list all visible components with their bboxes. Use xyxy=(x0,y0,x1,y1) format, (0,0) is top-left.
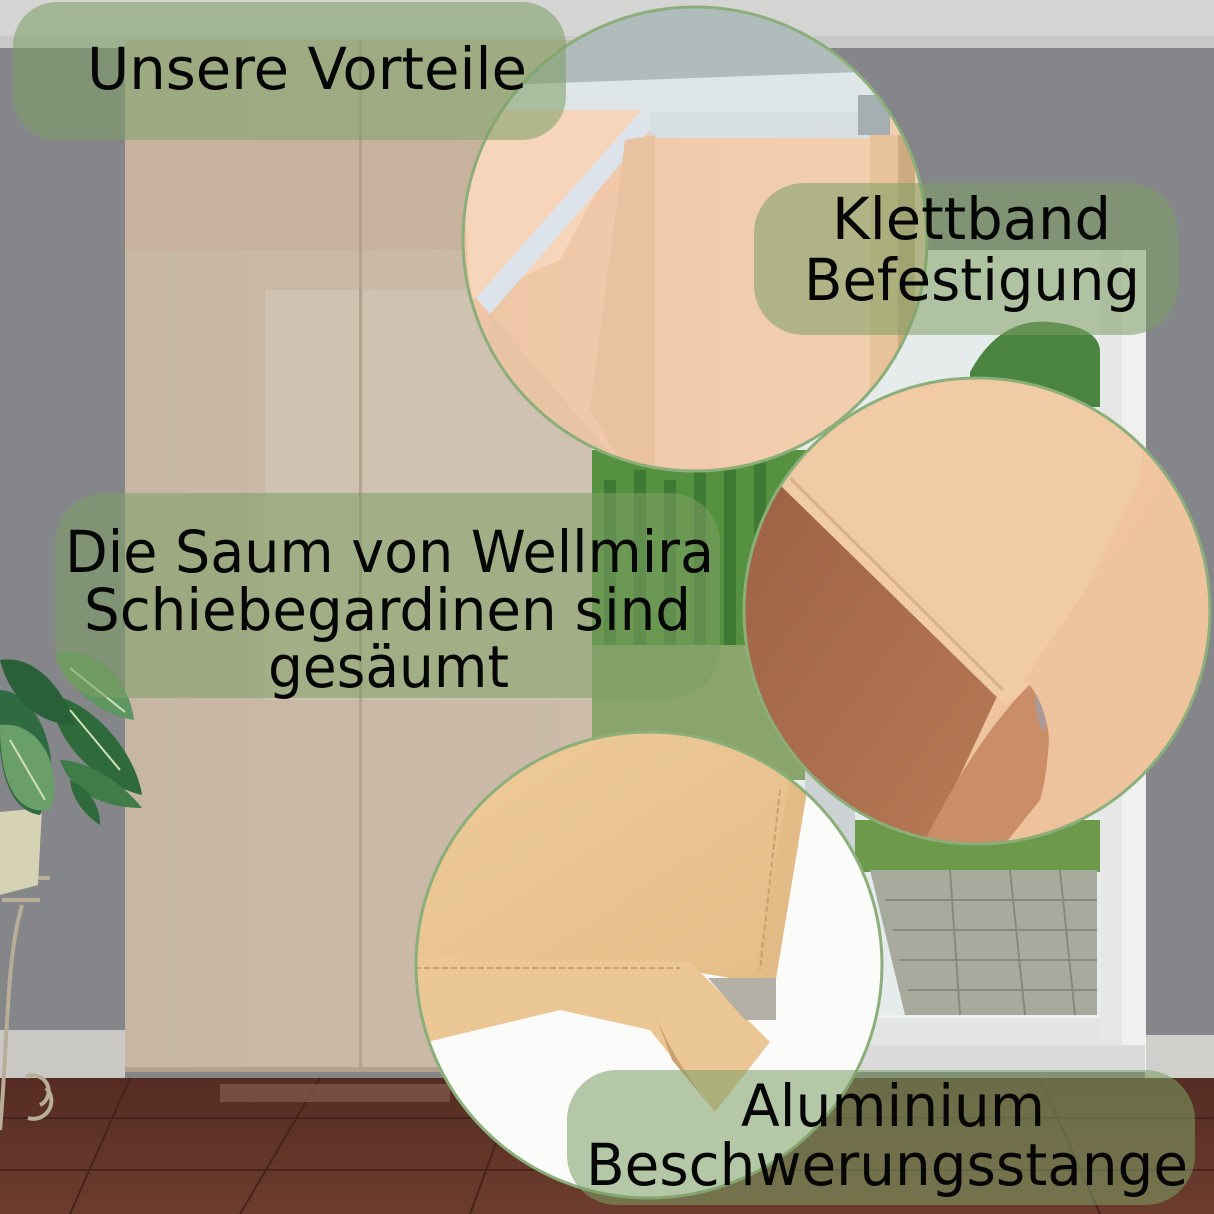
heading pill: Unsere Vorteile xyxy=(13,2,566,140)
photo circle: Velcro attachment detail xyxy=(460,0,930,480)
label text: Befestigung xyxy=(804,246,1140,314)
heading: Unsere Vorteile xyxy=(87,35,527,103)
label text: Klettband xyxy=(832,185,1111,253)
sliding curtain panels xyxy=(125,40,592,1072)
label pill: hem description xyxy=(55,493,720,701)
label text: Die Saum von Wellmira xyxy=(65,518,714,586)
label pill: Aluminium Beschwerungsstange xyxy=(567,1070,1195,1205)
label text xyxy=(65,518,714,701)
label text: Aluminium xyxy=(741,1072,1045,1140)
label text xyxy=(586,1072,1188,1199)
label text: gesäumt xyxy=(268,633,509,701)
label pill: Klettband Befestigung xyxy=(754,183,1178,335)
label text: Schiebegardinen sind xyxy=(84,576,691,644)
label text xyxy=(804,185,1140,314)
label text: Beschwerungsstange xyxy=(586,1131,1188,1199)
window with garden view xyxy=(590,250,1146,1072)
icon: potted plant on stand xyxy=(0,652,142,1130)
photo circle: aluminium weight bar detail xyxy=(415,730,885,1200)
photo circle: sewn hem held by hand xyxy=(740,375,1214,850)
